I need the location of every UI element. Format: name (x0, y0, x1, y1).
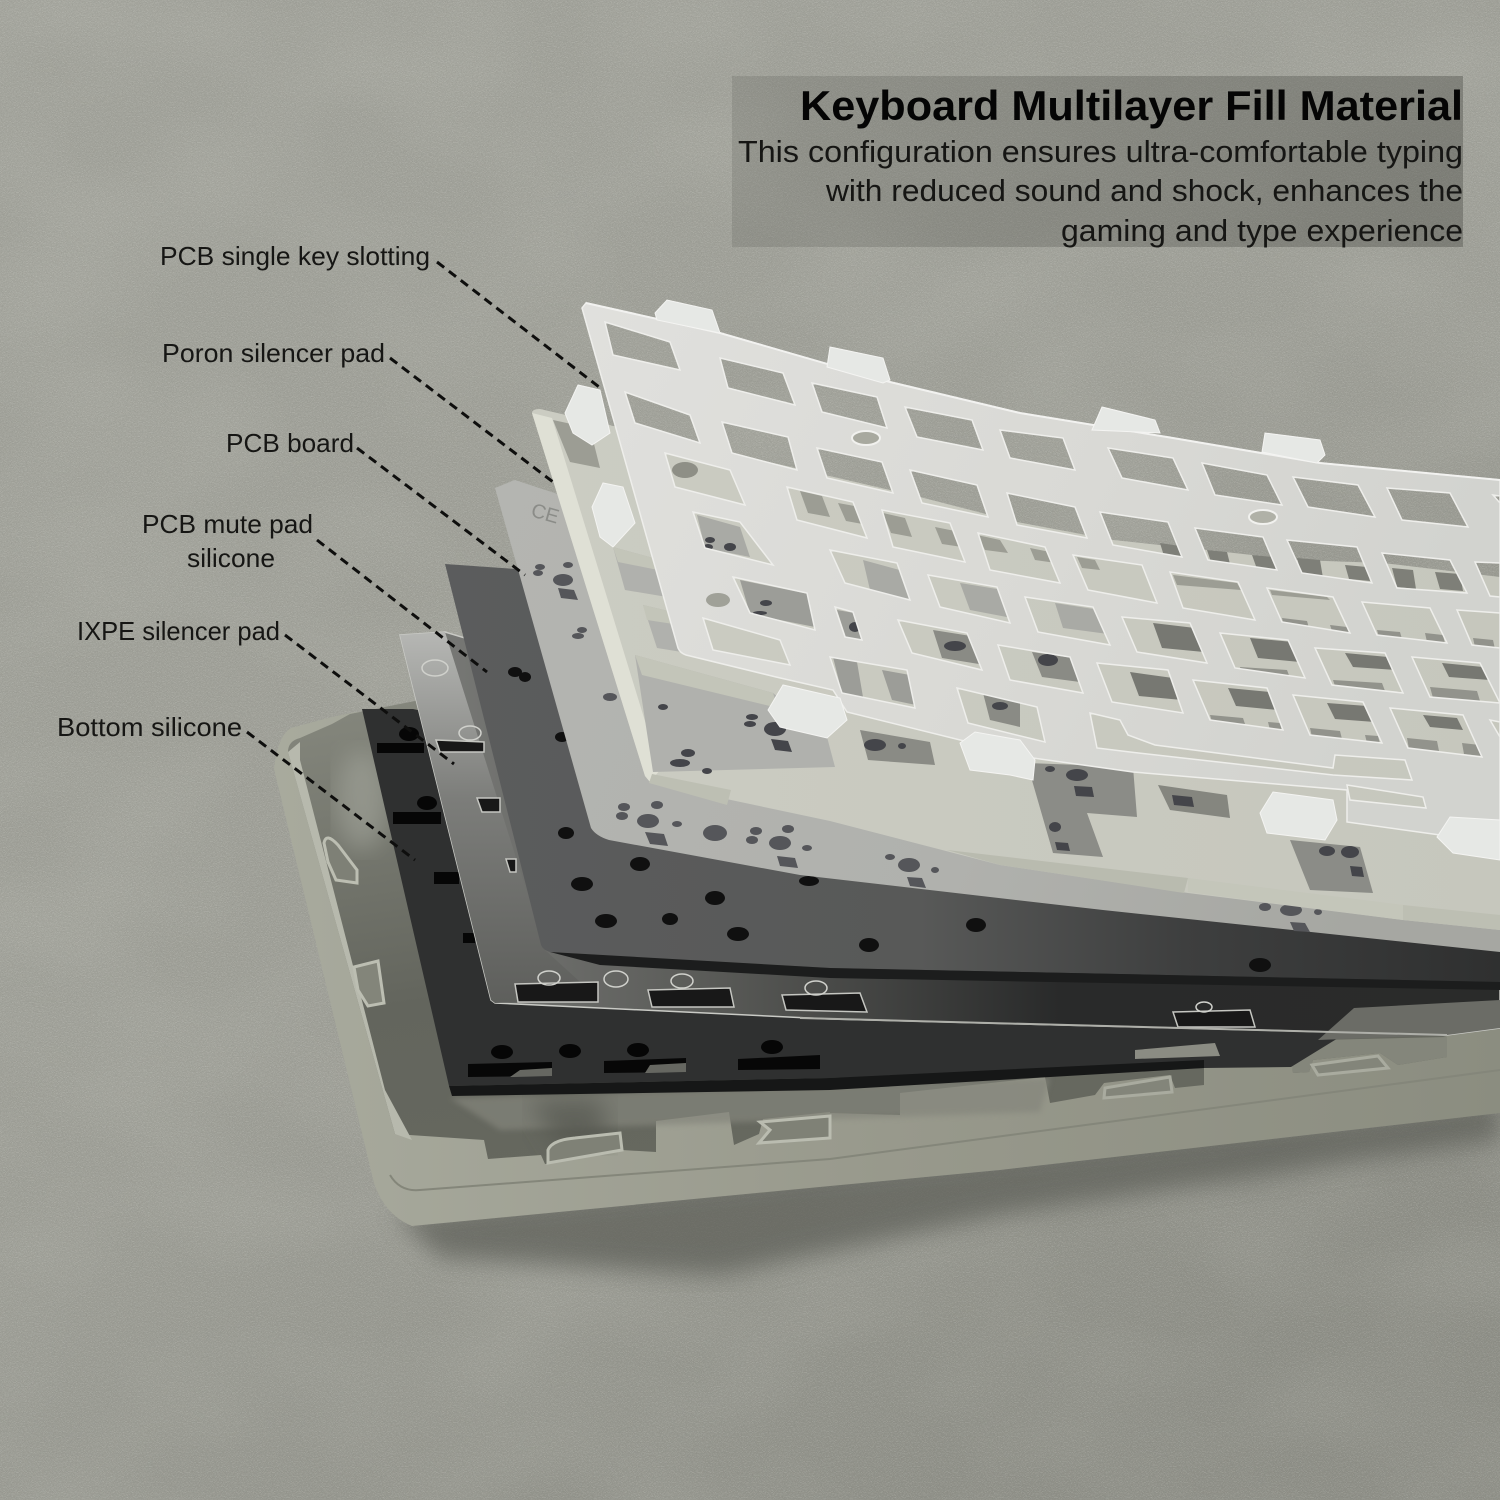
label: PCB board: PCB board (226, 428, 354, 458)
layer: PCB board, grey plate (495, 480, 1500, 952)
labels (57, 241, 430, 742)
poron left rim (532, 413, 660, 782)
IXPE silver left strip (400, 632, 600, 1003)
callout lines: dashed leaders (247, 262, 603, 860)
circular opening lower (706, 593, 730, 607)
poron lip 2 (947, 850, 1188, 893)
poron windows showing the surface (553, 420, 1330, 600)
poron cutouts showing the PCB (613, 547, 835, 772)
layer: Poron silencer pad, white-green plate (532, 409, 1500, 930)
description text: gaming and type experience (1061, 213, 1463, 248)
label: PCB mute pad silicone (142, 509, 313, 573)
label: PCB single key slotting: PCB single key slotting (160, 241, 430, 271)
label: IXPE silencer pad: IXPE silencer pad (77, 616, 280, 646)
title: Keyboard Multilayer Fill Material (800, 82, 1463, 129)
mounting hole (852, 431, 880, 445)
dark holes in the poron cutouts (658, 537, 1364, 877)
circular opening (672, 462, 698, 478)
clip: left 2 (354, 961, 384, 1006)
case floor (288, 700, 1447, 1164)
slots in black plate (377, 743, 475, 943)
layer: PCB mute pad silicone, dark plate (445, 564, 1500, 990)
clip: bottom 4 (1312, 1056, 1388, 1075)
PCB hole clusters (533, 562, 1322, 932)
plate rim highlight (586, 303, 1500, 480)
label: Poron silencer pad: Poron silencer pad (162, 338, 385, 368)
clip: bottom 3 (1104, 1077, 1172, 1098)
poron lip 1 (649, 774, 731, 805)
case seam (390, 1070, 1500, 1190)
title panel (732, 76, 1463, 248)
label: Bottom silicone: Bottom silicone (57, 712, 242, 742)
label: PCB mute pad silicone: PCB mute pad (142, 509, 313, 539)
layer: IXPE silencer pad, translucent (400, 632, 1500, 1040)
case left inner wall (288, 742, 412, 1140)
L-shaped poron cutouts (1027, 763, 1137, 857)
floor lit area at the right (1291, 1037, 1447, 1073)
clip: left 1 (324, 838, 357, 883)
mounting hole right (1249, 510, 1277, 524)
layer: PCB single key slotting, frosted plate (565, 300, 1500, 860)
description text: with reduced sound and shock, enhances the (825, 173, 1463, 208)
bottom case (274, 700, 1500, 1226)
case shadow on the surface (395, 1100, 1500, 1275)
slots in IXPE (436, 740, 1255, 1027)
clip: bottom 2 (759, 1116, 830, 1143)
clip: bottom 1 (548, 1133, 622, 1163)
layer: bottom silicone, black plate (362, 709, 1400, 1096)
description text (738, 134, 1463, 248)
CE mark: CE (529, 500, 561, 528)
label: PCB mute pad silicone: silicone (187, 543, 275, 573)
description text: This configuration ensures ultra-comfortable typing (738, 134, 1463, 169)
poron lip 3 (1188, 878, 1403, 920)
frosted clips (565, 300, 1500, 860)
poron lip 4 (1403, 905, 1500, 930)
